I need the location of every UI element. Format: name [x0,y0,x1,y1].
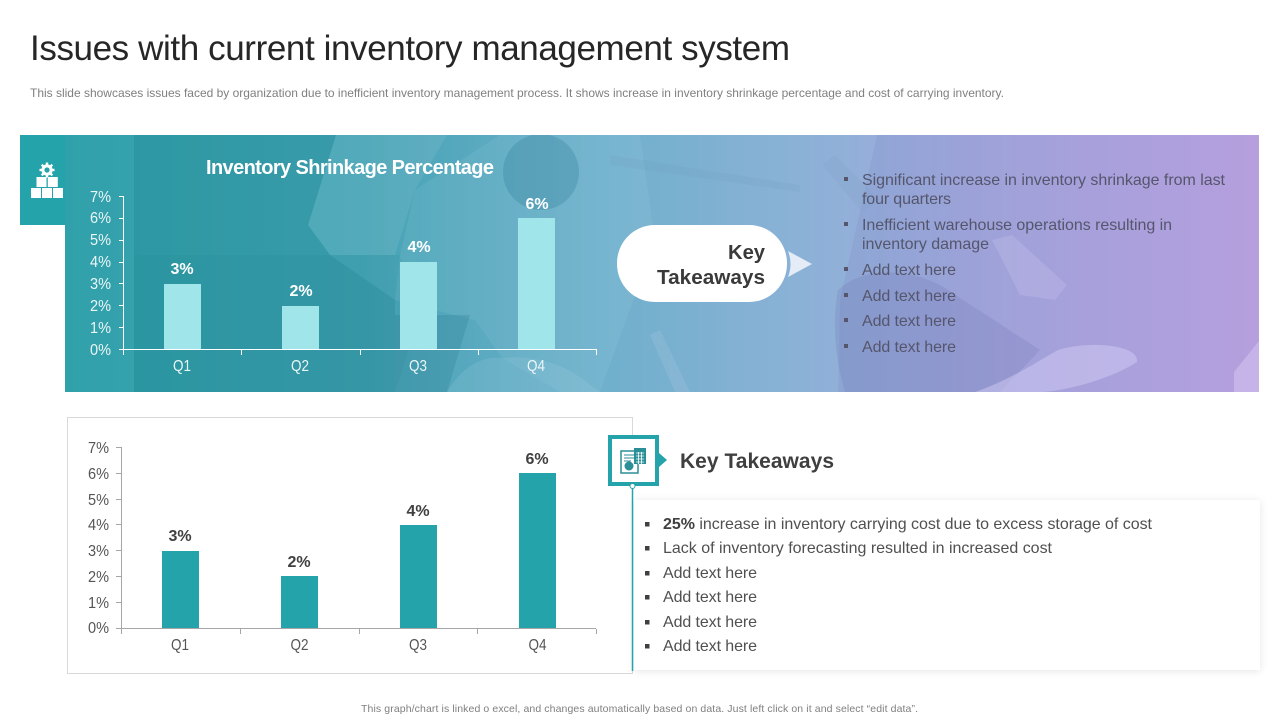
bar chart: bottom: Q3 [409,637,427,654]
bar chart: top: 6% [525,196,549,213]
bar chart: bottom: 4% [88,517,109,534]
bar chart: top: Q3 [409,358,427,375]
bar chart: top: 1% [90,320,111,337]
photo overlay: office desk scene [134,134,1259,392]
text block: top takeaways list [844,172,1226,356]
text block: lower takeaways list: Lack of inventory forecasting resulted in increased cost [663,540,1053,557]
bar chart: bottom: 4% [406,503,430,520]
heading: inventory shrinkage percentage: Inventory Shrinkage Percentage [206,157,494,179]
connector line [632,488,634,671]
text block: lower takeaways list: Add text here [663,614,757,631]
text block: lower takeaways list: Add text here [663,565,757,582]
bar chart: top: 6% [90,210,111,227]
text block: lower takeaways list [645,516,1153,655]
bar chart: top: Q4 [527,358,545,375]
bar chart: bottom: 2% [88,569,109,586]
text block: top takeaways list: four quarters [862,191,951,208]
bar chart: top: 4% [407,239,431,256]
text block: lower takeaways list: 25% increase in inventory carrying cost due to excess storage of cost [663,516,1153,533]
bar chart: bottom: 2% [287,554,311,571]
text block: lower takeaways list: Add text here [663,638,757,655]
bar chart: top: 7% [90,189,111,206]
callout: key takeaways bubble [617,225,812,302]
callout: key takeaways bubble: Key [728,241,766,264]
text block: top takeaways list: Add text here [862,339,956,356]
text block: top takeaways list: Add text here [862,288,956,305]
heading: key takeaways: Key Takeaways [680,450,834,473]
bar chart: bottom: 7% [88,440,109,457]
bar chart: bottom [88,440,596,654]
bar chart: bottom: Q2 [290,637,309,654]
callout: key takeaways bubble: Takeaways [657,266,765,289]
text block: top takeaways list: Add text here [862,262,956,279]
bar chart: bottom: Q4 [528,637,547,654]
bar chart: bottom: 6% [525,451,549,468]
bar chart: top: 4% [90,254,111,271]
subtitle: This slide showcases issues faced by organization due to inefficient inventory management process. It shows increase in inventory shrinkage percentage and cost of carrying inventory. [30,86,1004,100]
panel: lower takeaways card [634,500,1260,670]
bar chart: bottom: 0% [88,620,109,637]
bar chart: top: Q1 [173,358,191,375]
bar chart: bottom: 1% [88,595,109,612]
bar chart: bottom: 3% [88,543,109,560]
bar chart: top: 3% [90,276,111,293]
bar chart: bottom: 6% [88,466,109,483]
bar chart: top: 2% [90,298,111,315]
gear [31,162,63,198]
panel: carrying cost chart [68,418,632,674]
footnote: This graph/chart is linked o excel, and changes automatically based on data. Just left click on it and select “edit data”. [361,703,918,715]
text block: top takeaways list: Inefficient warehouse operations resulting in [862,217,1172,234]
icon: inventory boxes tab [20,135,65,225]
text block: top takeaways list: Significant increase in inventory shrinkage from last [862,172,1226,189]
bar chart: top: 5% [90,232,111,249]
bar chart: top: 3% [170,261,194,278]
bar chart: top: 0% [90,342,111,359]
bar chart: bottom: Q1 [171,637,189,654]
bar chart: bottom: 5% [88,492,109,509]
title: Issues with current inventory management system [30,29,790,68]
text block: top takeaways list: inventory damage [862,236,989,253]
bar chart: bottom: 3% [168,528,192,545]
text block: lower takeaways list: Add text here [663,589,757,606]
panel: inventory shrinkage banner [65,134,1259,392]
bar chart: top: Q2 [291,358,309,375]
bar chart: top [90,189,597,375]
bar chart: top: 2% [289,283,313,300]
icon: calculator and invoice [610,437,667,488]
text block: top takeaways list: Add text here [862,313,956,330]
